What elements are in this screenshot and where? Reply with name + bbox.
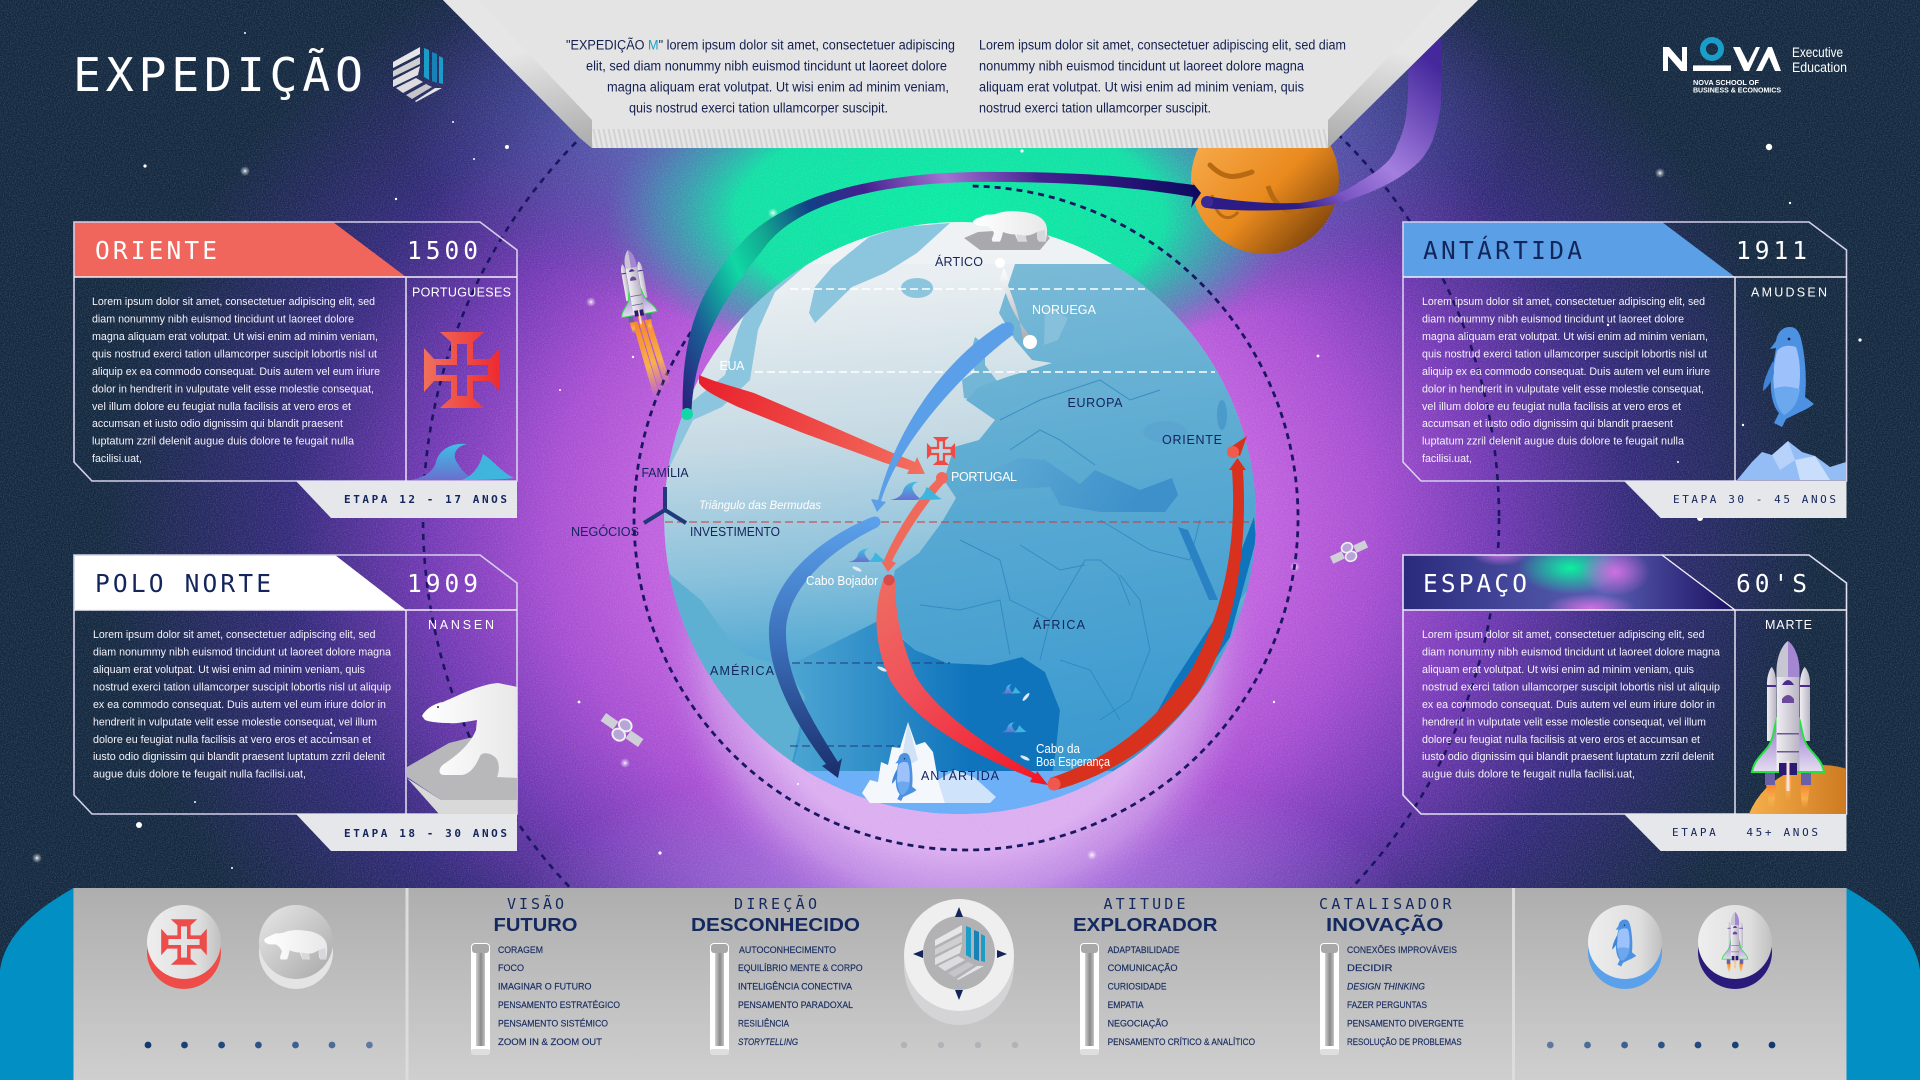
planet Mars	[1191, 106, 1339, 254]
panel body text: accumsan et iusto odio dignissim qui blandit praesent	[92, 418, 343, 430]
intro text right column	[979, 38, 1346, 116]
panel body text: dolor in hendrerit in vulputate velit esse molestie consequat,	[92, 383, 374, 395]
panel body text: aliquip ex ea commodo consequat. Duis autem vel eum iriure	[92, 366, 380, 378]
arrow: blue Bermuda to Antartida	[769, 516, 880, 778]
panel body text: accumsan et iusto odio dignissim qui blandit praesent	[1422, 418, 1673, 430]
column: Atitude Explorador: CURIOSIDADE	[1108, 982, 1167, 992]
map labels	[571, 254, 1222, 783]
intro text left column: elit, sed diam nonummy nibh euismod tincidunt ut laoreet dolore	[586, 58, 947, 74]
age stage tag	[296, 814, 517, 851]
intro text right column: nostrud exerci tation ullamcorper suscipit.	[979, 100, 1211, 116]
column: Atitude Explorador: COMUNICAÇÃO	[1108, 963, 1178, 973]
panel: Antartida	[1403, 222, 1846, 518]
panel body text: diam nonummy nibh euismod tincidunt ut laoreet dolore magna	[93, 646, 392, 658]
badge: polar bear	[259, 905, 333, 989]
eurasia and africa	[889, 264, 1270, 785]
panel body text: quis nostrud exerci tation ullamcorper suscipit lobortis nisl ut	[1422, 348, 1707, 360]
column: Visao Futuro: ZOOM IN & ZOOM OUT	[498, 1037, 602, 1047]
icon: wave	[410, 444, 514, 480]
age stage tag: ETAPA 12 - 17 ANOS	[344, 493, 507, 506]
explorer label: MARTE	[1765, 618, 1812, 632]
panel body text	[92, 296, 380, 465]
panel body text: diam nonummy nibh euismod tincidunt ut laoreet dolore	[1422, 314, 1684, 326]
icon: penguin	[1763, 327, 1814, 427]
panel body text: dolore eu feugiat nulla facilisis at vero eros et accumsan et	[1422, 734, 1700, 746]
blue corner left	[0, 888, 74, 1080]
icon: iceberg	[1737, 441, 1846, 480]
panel body text: luptatum zzril delenit augue duis dolore te feugait nulla	[1422, 436, 1685, 448]
globe map	[640, 215, 1270, 821]
logo: NOVA Executive Education: Education	[1792, 59, 1847, 75]
rocket small flying	[610, 247, 673, 401]
map labels: ÁFRICA	[1033, 617, 1086, 632]
panel body text: iusto odio dignissim qui blandit praesent luptatum zzril delenit	[1422, 751, 1714, 763]
purple ribbon orbit around Mars	[1207, 40, 1442, 211]
arctic cap	[808, 222, 1112, 264]
column: Catalisador Inovacao: FAZER PERGUNTAS	[1347, 1000, 1427, 1010]
seas	[1030, 460, 1178, 512]
orbit: outer dashed circle	[423, 0, 1499, 1056]
age stage tag: ETAPA 18 - 30 ANOS	[344, 827, 507, 840]
heading: ORIENTE	[95, 236, 217, 265]
icon: cross	[424, 332, 500, 408]
panel body text: vel illum dolore eu feugiat nulla facilisis at vero eros et	[1422, 401, 1681, 413]
intro text right column: Lorem ipsum dolor sit amet, consectetuer adipiscing elit, sed diam	[979, 38, 1346, 52]
compass badge	[904, 899, 1014, 1025]
age stage tag	[296, 481, 517, 518]
heading: ANTÁRTIDA	[1423, 236, 1582, 265]
column: Visao Futuro: PENSAMENTO ESTRATÉGICO	[498, 1000, 620, 1010]
column: Direcao Desconhecido: AUTOCONHECIMENTO	[739, 945, 836, 955]
panel body text: magna aliquam erat volutpat. Ut wisi enim ad minim veniam,	[92, 331, 378, 343]
antarctica	[806, 771, 1114, 814]
intro text left column: magna aliquam erat volutpat. Ut wisi enim ad minim veniam,	[607, 80, 949, 94]
intro text left column: quis nostrud exerci tation ullamcorper suscipit.	[629, 100, 888, 116]
blue corner right	[1846, 888, 1920, 1080]
column: Direcao Desconhecido: DESCONHECIDO	[691, 914, 860, 935]
badge: penguin	[1588, 905, 1662, 989]
map labels: ORIENTE	[1162, 433, 1222, 447]
panel body text: aliquip ex ea commodo consequat. Duis autem vel eum iriure	[1422, 366, 1710, 378]
heading: POLO NORTE	[95, 569, 271, 598]
logo: NOVA Executive Education	[1663, 40, 1847, 94]
orbit: inner dashed circle	[634, 186, 1298, 850]
south america	[669, 574, 805, 762]
panel body text: nostrud exerci tation ullamcorper suscipit lobortis nisl ut aliquip	[1422, 681, 1720, 693]
icon: iceberg and penguin	[862, 722, 996, 803]
icon: waves and fish	[848, 482, 1030, 762]
badge: rocket	[1698, 905, 1772, 989]
panel body text: dolore eu feugiat nulla facilisis at vero eros et accumsan et	[93, 734, 371, 746]
icon: polar bear on ice	[407, 683, 518, 814]
map labels: NEGÓCIOS	[571, 524, 639, 539]
arrow: salmon Portugal to Cabo Bojador	[879, 472, 948, 572]
panel body text: hendrerit in vulputate velit esse molestie consequat, vel illum	[1422, 716, 1706, 728]
map labels: AMÉRICA	[710, 663, 775, 678]
panel body text: hendrerit in vulputate velit esse molestie consequat, vel illum	[93, 716, 377, 728]
map labels: EUROPA	[1068, 396, 1123, 410]
column: Visao Futuro: FOCO	[498, 963, 524, 973]
map labels: EUA	[720, 359, 745, 373]
column: Atitude Explorador	[1073, 895, 1255, 1055]
column: Atitude Explorador: ADAPTABILIDADE	[1108, 945, 1180, 955]
age stage tag	[1624, 814, 1846, 851]
column: Catalisador Inovacao: DECIDIR	[1347, 963, 1393, 973]
panel body text: facilisi.uat,	[1422, 453, 1472, 465]
column: Direcao Desconhecido: PENSAMENTO PARADOXAL	[738, 1000, 853, 1010]
satellite left	[597, 708, 647, 752]
logo: NOVA Executive Education: BUSINESS & ECONOMICS	[1693, 88, 1781, 94]
icon: small cross at Portugal	[927, 437, 955, 465]
map labels: PORTUGAL	[951, 470, 1017, 484]
panel body text	[1422, 629, 1721, 781]
panel body text: ex ea commodo consequat. Duis autem vel eum iriure dolor in	[1422, 699, 1715, 711]
greenland	[809, 223, 950, 323]
arrow: white Norway to Artic	[995, 258, 1037, 349]
age stage tag: ETAPA 45+ ANOS	[1672, 826, 1818, 839]
panel body text: augue duis dolore te feugait nulla facilisi.uat,	[1422, 769, 1635, 781]
icon: cube logo	[393, 47, 443, 102]
panel body text: augue duis dolore te feugait nulla facilisi.uat,	[93, 769, 306, 781]
panel body text: Lorem ipsum dolor sit amet, consectetuer adipiscing elit, sed	[1422, 629, 1704, 641]
column: Catalisador Inovacao: DESIGN THINKING	[1347, 982, 1425, 992]
column: Visao Futuro: PENSAMENTO SISTÉMICO	[498, 1019, 608, 1029]
icon: orange planet	[1749, 765, 1846, 814]
left progress dots	[145, 1042, 373, 1048]
year: 1500	[407, 236, 478, 265]
heading: ESPAÇO	[1423, 569, 1527, 598]
map labels: ANTÁRTIDA	[921, 768, 1000, 783]
column: Catalisador Inovacao	[1319, 895, 1464, 1055]
panel body text: Lorem ipsum dolor sit amet, consectetuer adipiscing elit, sed	[93, 629, 376, 641]
panel body text	[93, 629, 392, 781]
logo: NOVA Executive Education: Executive	[1792, 44, 1843, 60]
year: 1909	[407, 569, 478, 598]
intro text left column	[566, 38, 955, 116]
map labels: NORUEGA	[1032, 303, 1097, 317]
panel body text: luptatum zzril delenit augue duis dolore te feugait nulla	[92, 436, 355, 448]
panel: Polo Norte	[74, 555, 518, 851]
map labels: Triângulo das Bermudas	[699, 498, 821, 512]
year: 60'S	[1736, 569, 1807, 598]
panel body text: nostrud exerci tation ullamcorper suscipit lobortis nisl ut aliquip	[93, 681, 391, 693]
column: Direcao Desconhecido: STORYTELLING	[738, 1037, 798, 1047]
panel body text: quis nostrud exerci tation ullamcorper suscipit lobortis nisl ut	[92, 348, 377, 360]
column: Visao Futuro: FUTURO	[494, 914, 578, 935]
column: Direcao Desconhecido: EQUILÍBRIO MENTE & CORPO	[738, 963, 863, 973]
column: Direcao Desconhecido: INTELIGÊNCIA CONECTIVA	[738, 982, 853, 992]
column: Direcao Desconhecido: RESILIÊNCIA	[738, 1019, 790, 1029]
icon: shuttle rocket	[1752, 641, 1824, 808]
arrow: dark red Boa Esperanca to Oriente	[1048, 436, 1247, 790]
arrow: red Cabo Bojador to Boa Esperanca	[876, 574, 1048, 785]
center dots	[901, 1042, 1018, 1048]
column: Catalisador Inovacao: CONEXÕES IMPROVÁVEIS	[1347, 945, 1457, 955]
arrow: red EUA to Portugal	[699, 375, 925, 474]
explorer label: PORTUGUESES	[412, 286, 511, 300]
column: Visao Futuro	[471, 894, 620, 1055]
iceland	[901, 278, 933, 298]
panel body text: aliquam erat volutpat. Ut wisi enim ad minim veniam, quis	[1422, 664, 1694, 676]
age stage tag: ETAPA 30 - 45 ANOS	[1673, 493, 1836, 506]
column: Direcao Desconhecido: DIREÇÃO	[734, 894, 817, 913]
arrow: green to purple arc to Mars	[681, 172, 1213, 420]
column: Visao Futuro: CORAGEM	[498, 945, 543, 955]
year: 1911	[1736, 236, 1807, 265]
right progress dots	[1547, 1042, 1775, 1048]
intro text right column: aliquam erat volutpat. Ut wisi enim ad minim veniam, quis	[979, 80, 1304, 94]
header banner with intro text	[443, 0, 1478, 148]
panel body text: aliquam erat volutpat. Ut wisi enim ad minim veniam, quis	[93, 664, 365, 676]
age stage tag	[1624, 481, 1846, 518]
panel: Espaco	[1402, 554, 1848, 851]
title: EXPEDIÇÃO	[73, 48, 363, 102]
column: Visao Futuro: IMAGINAR O FUTURO	[498, 982, 592, 992]
explorer label: AMUDSEN	[1751, 286, 1827, 300]
panel body text: vel illum dolore eu feugiat nulla facilisis at vero eros et	[92, 401, 351, 413]
map labels: Cabo Bojador	[806, 574, 878, 588]
satellite right	[1328, 535, 1370, 569]
map labels: FAMÍLIA	[642, 465, 689, 480]
panel body text: diam nonummy nibh euismod tincidunt ut laoreet dolore	[92, 314, 354, 326]
column: Catalisador Inovacao: PENSAMENTO DIVERGENTE	[1347, 1019, 1464, 1029]
logo: NOVA Executive Education: NOVA SCHOOL OF	[1693, 80, 1760, 87]
explorer label: NANSEN	[428, 618, 494, 632]
map labels: ÁRTICO	[935, 254, 983, 269]
panel body text: dolor in hendrerit in vulputate velit esse molestie consequat,	[1422, 383, 1704, 395]
intro text left column: "EXPEDIÇÃO M" lorem ipsum dolor sit amet, consectetuer adipiscing	[566, 38, 955, 52]
column: Atitude Explorador: PENSAMENTO CRÍTICO & ANALÍTICO	[1108, 1037, 1255, 1047]
arrow: blue Norway to Bermuda	[871, 322, 1014, 512]
latitude lines	[665, 289, 1255, 746]
panel: Oriente	[74, 222, 517, 518]
column: Atitude Explorador: NEGOCIAÇÃO	[1108, 1019, 1168, 1029]
column: Direcao Desconhecido	[691, 894, 863, 1055]
bottom panel	[74, 888, 1846, 1080]
panel body text: ex ea commodo consequat. Duis autem vel eum iriure dolor in	[93, 699, 386, 711]
panel body text: facilisi.uat,	[92, 453, 142, 465]
panel body text: Lorem ipsum dolor sit amet, consectetuer adipiscing elit, sed	[92, 296, 375, 308]
column: Atitude Explorador: ATITUDE	[1104, 895, 1186, 913]
map labels: INVESTIMENTO	[690, 525, 780, 539]
north america coast	[668, 264, 807, 468]
icon: family business investment triad	[644, 487, 686, 523]
uk and ireland	[962, 337, 997, 398]
panel body text	[1422, 296, 1710, 465]
column: Atitude Explorador: EMPATIA	[1108, 1000, 1144, 1010]
south atlantic	[786, 620, 1060, 785]
panel body text: magna aliquam erat volutpat. Ut wisi enim ad minim veniam,	[1422, 331, 1708, 343]
column: Catalisador Inovacao: CATALISADOR	[1319, 895, 1452, 913]
column: Visao Futuro: VISÃO	[507, 894, 564, 913]
column: Atitude Explorador: EXPLORADOR	[1073, 914, 1218, 935]
badge: cross	[147, 905, 221, 989]
icon: polar bear on ice floe	[964, 211, 1050, 250]
panel body text: iusto odio dignissim qui blandit praesent luptatum zzril delenit	[93, 751, 385, 763]
panel body text: diam nonummy nibh euismod tincidunt ut laoreet dolore magna	[1422, 646, 1721, 658]
column: Catalisador Inovacao: INOVAÇÃO	[1326, 914, 1444, 935]
intro text right column: nonummy nibh euismod tincidunt ut laoreet dolore magna	[979, 58, 1304, 74]
column: Catalisador Inovacao: RESOLUÇÃO DE PROBLEMAS	[1347, 1037, 1462, 1047]
panel body text: Lorem ipsum dolor sit amet, consectetuer adipiscing elit, sed	[1422, 296, 1705, 308]
map labels: Boa Esperança	[1036, 755, 1110, 769]
map labels: Cabo da	[1036, 742, 1080, 756]
borders	[920, 380, 1200, 720]
